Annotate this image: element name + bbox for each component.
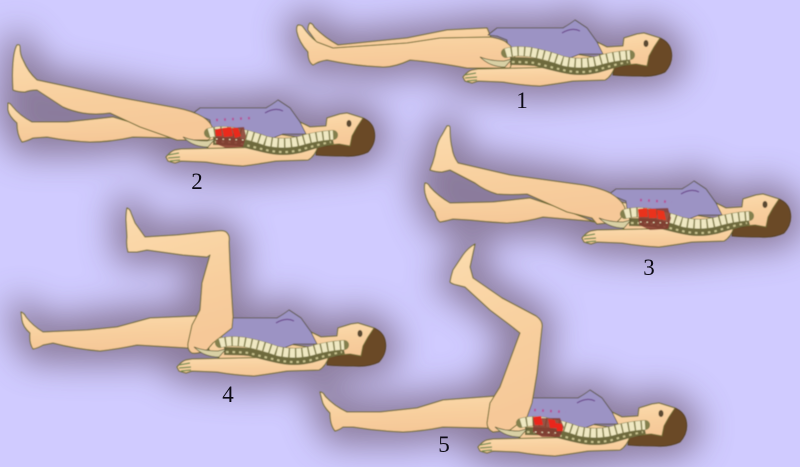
pain area: lower back bbox=[599, 200, 749, 233]
label: number 1: 1 bbox=[516, 88, 528, 113]
figure 1: both legs flat bbox=[297, 20, 672, 86]
figure 3: one leg raised bbox=[424, 126, 791, 247]
label: number 3: 3 bbox=[643, 255, 655, 280]
pain area: lower back bbox=[183, 118, 333, 152]
label: number 4: 4 bbox=[222, 382, 234, 407]
label: number 2: 2 bbox=[191, 169, 203, 194]
label: number 5: 5 bbox=[438, 432, 450, 457]
figure 5: leg raised with knee bent high bbox=[320, 244, 687, 456]
figure 2: one leg slightly raised bbox=[8, 45, 375, 166]
pain area: lower back bbox=[495, 410, 645, 442]
figure 4: one knee bent bbox=[21, 208, 386, 376]
